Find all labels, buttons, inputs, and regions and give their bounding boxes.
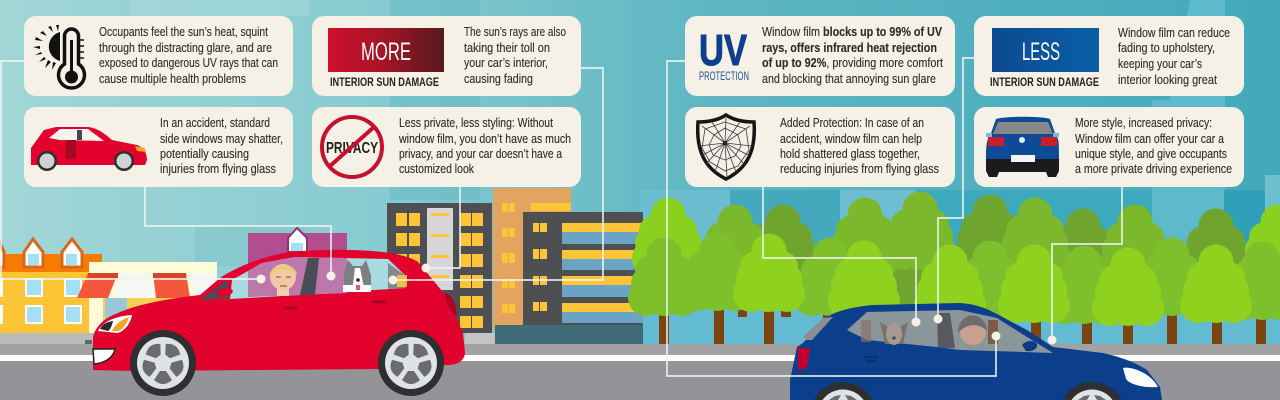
panel: more style [974, 107, 1244, 187]
panel: sun heat [24, 16, 293, 96]
panel: more style: Window film can offer your car a [1075, 131, 1225, 146]
callout dots [256, 264, 1056, 344]
buildings: left town [0, 228, 347, 340]
panel: UV protection: of up to 92%, providing more comfort [762, 55, 943, 70]
panel: more interior sun damage: your car’s interior, [464, 55, 548, 70]
panel: side windows shatter: potentially causing [160, 146, 249, 161]
panel: sun heat: through the distracting glare, and are [99, 40, 272, 55]
panel: more style: unique style, and give occupants [1075, 146, 1227, 161]
icon: no privacy [322, 117, 382, 177]
dog passenger [861, 320, 908, 345]
icon: UV: UV [699, 26, 748, 75]
badge: less [992, 28, 1099, 72]
label: interior sun damage: INTERIOR SUN DAMAGE [990, 75, 1099, 89]
road and sidewalk [0, 333, 1280, 400]
panel: less privacy: customized look [399, 161, 474, 176]
rear wheel [814, 382, 872, 400]
blue car [790, 303, 1162, 400]
panel: less interior sun damage [974, 16, 1244, 96]
panel: more interior sun damage [312, 16, 581, 96]
panel: less interior sun damage: interior looking great [1118, 72, 1217, 87]
red car [85, 250, 465, 396]
panel: side windows shatter [24, 107, 293, 187]
panel: more style: a more private driving experience [1075, 161, 1232, 176]
panel: less interior sun damage: fading to upholstery, [1118, 40, 1215, 55]
badge: less: LESS [1022, 38, 1060, 66]
woman passenger [958, 315, 998, 345]
panel: less privacy: window film, you don’t have as much [398, 131, 571, 146]
icon: sun and thermometer [33, 25, 84, 88]
trees [628, 192, 1280, 345]
rear wheel [378, 330, 444, 396]
dog [343, 260, 371, 292]
driver [270, 264, 297, 296]
text: UV protection: Window film blocks up to 99% of UV [762, 24, 942, 39]
icon: blue car rear view [986, 117, 1059, 177]
buildings: city block [387, 188, 643, 344]
front wheel [130, 330, 196, 396]
panel: sun heat: exposed to dangerous UV rays that can [99, 55, 278, 70]
text: reduced fading: Window film can reduce [1118, 25, 1230, 40]
icon: no privacy: PRIVACY [326, 140, 378, 157]
panel: side windows shatter: side windows may shatter, [160, 131, 283, 146]
text: less privacy: Less private, less styling: Without [399, 115, 553, 130]
panel: less privacy: privacy, and your car doesn’t have a [399, 146, 563, 161]
badge: more [328, 28, 444, 72]
panel: added protection: reducing injuries from flying glass [780, 161, 939, 176]
icon: small red car [31, 127, 147, 171]
headlights [85, 315, 132, 364]
panel: added protection [685, 107, 955, 187]
panel: less interior sun damage: keeping your car’s [1118, 56, 1202, 71]
panel: added protection: hold shattered glass together, [780, 146, 920, 161]
text: more style: More style, increased privacy: [1075, 115, 1212, 130]
panel: UV protection: and blocking that annoying sun glare [762, 71, 936, 86]
text: sun heat: Occupants feel the sun’s heat, squint [99, 24, 268, 39]
panel: more interior sun damage: taking their toll on [464, 40, 550, 55]
panel: side windows shatter: injuries from flying glass [160, 161, 276, 176]
panel: less privacy [312, 107, 581, 187]
label: interior sun damage: INTERIOR SUN DAMAGE [330, 75, 439, 89]
panel: sun heat: cause multiple health problems [99, 71, 246, 86]
panel: UV protection [685, 16, 955, 96]
callout lines [1, 58, 1122, 376]
front wheel [1063, 382, 1121, 400]
label: protection: PROTECTION [699, 69, 749, 83]
panel: more interior sun damage: causing fading [464, 71, 533, 86]
badge: more: MORE [361, 38, 411, 66]
panel: added protection: accident, window film can help [780, 131, 922, 146]
panel: UV protection: rays, offers infrared heat rejection [762, 40, 937, 55]
icon: shattered glass shield [698, 115, 754, 179]
text: interior fading: The sun’s rays are also [464, 24, 566, 39]
text: added protection: Added Protection: In case of an [780, 115, 924, 130]
text: side windows shatter: In an accident, standard [160, 115, 270, 130]
